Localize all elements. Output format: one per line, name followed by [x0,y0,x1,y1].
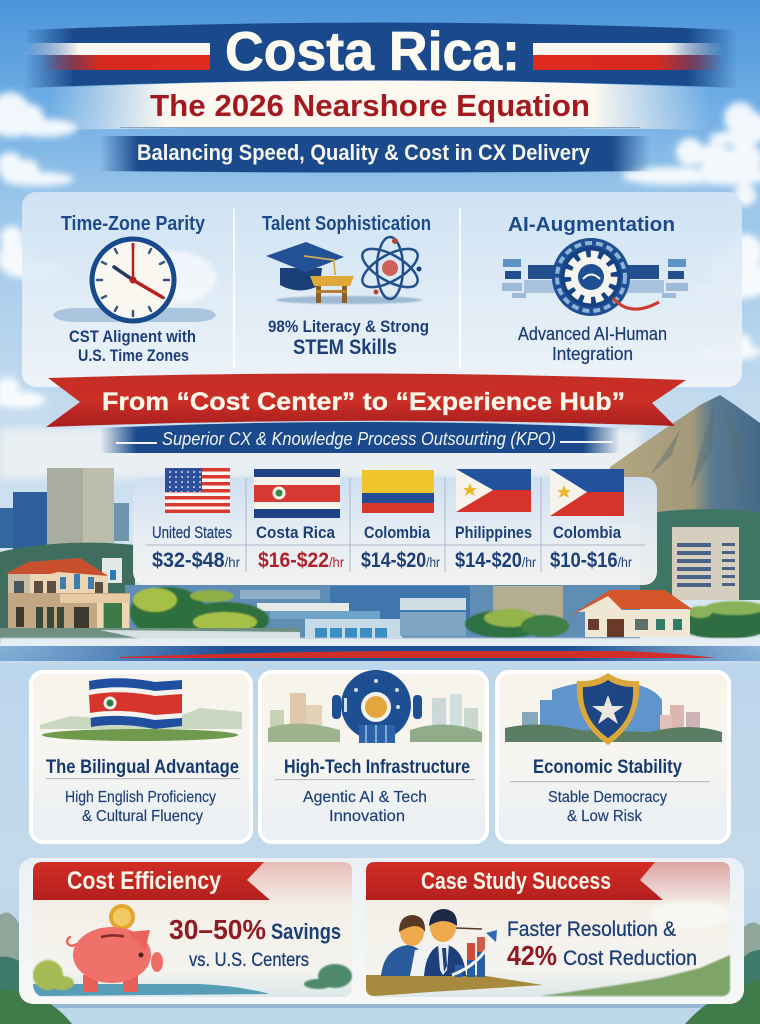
savings figure: 30–50% [169,914,266,945]
illustration: skyline [505,681,722,742]
icon: business team and growth chart [381,909,497,977]
result text: 42% [507,940,557,971]
KPO text: Superior CX & Knowledge Process Outsourting (KPO) [162,429,556,449]
result text [507,918,697,971]
country labels [152,523,621,542]
flag: Colombia [362,470,434,513]
city buildings [0,468,739,600]
card title: The Bilingual Advantage [46,757,239,778]
pillar: time-zone parity [53,213,216,365]
caption: Integration [552,344,633,364]
hourly rates: $10-$16/hr [550,549,632,572]
title banner [24,20,738,172]
savings figure: Savings [271,919,341,944]
country labels: United States [152,523,232,542]
house right [568,590,692,637]
savings figure [169,914,341,971]
illustration: waving flag [40,678,242,741]
scene haze [0,638,760,646]
caption: STEM Skills [293,336,397,359]
result text: Cost Reduction [563,947,697,970]
flag: Philippines repeat [550,469,624,516]
card title: High-Tech Infrastructure [284,757,470,778]
country labels: Colombia [364,523,430,542]
icon: piggy bank [67,904,163,992]
subtitle: The 2026 Nearshore Equation [150,88,590,123]
tagline: Balancing Speed, Quality & Cost in CX Delivery [137,140,591,165]
hourly rates [152,549,632,572]
result text: Faster Resolution & [507,918,676,941]
card: case study success [366,862,730,997]
card title: Economic Stability [533,757,682,778]
foreground foliage and water [0,912,760,1024]
caption: 98% Literacy & Strong [268,317,429,336]
flag: Costa Rica [254,469,340,518]
house left [5,558,130,628]
card text [548,789,667,825]
tab label: Case Study Success [421,868,611,895]
hourly rates: $32-$48/hr [152,549,240,572]
card: high-tech infrastructure [260,670,487,842]
greenery band [0,543,135,640]
left stripes [24,43,210,55]
icon: shield [577,673,639,745]
card text [65,789,216,825]
tab label: Cost Efficiency [67,867,221,895]
savings figure: vs. U.S. Centers [189,950,309,971]
right stripes [533,43,723,55]
card: cost efficiency [33,862,352,997]
caption: Advanced AI-Human [518,324,667,344]
panel: three pillars [22,192,742,387]
heading: Costa Rica: Costa Rica: [225,20,520,82]
red tab [366,862,663,900]
section divider stripe [0,646,760,661]
tagline band [100,136,650,172]
caption [69,327,196,365]
caption: U.S. Time Zones [78,346,189,365]
cloud [650,901,730,929]
flag: Philippines [456,469,531,512]
card text: Innovation [329,808,405,825]
center campus [240,586,563,638]
pillar: talent sophistication [262,213,431,359]
caption [268,317,429,359]
card text: Agentic AI & Tech [303,789,427,806]
caption [518,324,667,364]
card: economic stability [497,672,729,842]
clouds [0,92,760,408]
heading: AI-Augmentation [508,214,675,236]
foliage [540,955,730,996]
country labels: Colombia [553,523,621,542]
hourly rates: $14-$20/hr [361,549,440,572]
ribbon text: From “Cost Center” to “Experience Hub” [102,388,625,416]
pale haze behind rate panel [0,428,640,478]
icon: graduation cap and desk [266,242,422,304]
cream subtitle band [50,80,710,130]
card text: & Low Risk [567,808,643,825]
KPO band [100,422,620,453]
country labels: Costa Rica [256,523,335,542]
country labels: Philippines [455,523,532,542]
caption: CST Alignent with [69,327,196,346]
pillar: AI-augmentation [502,214,688,364]
hourly rates: $16-$22/hr [258,549,344,572]
illustration: skyline [268,693,482,742]
water [33,984,270,996]
icon: atom [357,237,423,299]
bushes [130,587,760,639]
flag: United States [165,468,230,513]
card text: High English Proficiency [65,789,216,806]
card text [303,789,427,825]
bottom frame [19,858,744,1004]
heading: Time-Zone Parity [61,213,206,235]
icon: AI head circuit [332,670,422,743]
card: bilingual advantage [31,672,251,842]
ribbon: cost center to experience hub [46,373,686,427]
mountain [610,395,760,560]
ground [366,975,543,996]
navy banner [24,22,738,88]
red tab [33,862,270,900]
hourly rates: $14-$20/hr [455,549,536,572]
card text: & Cultural Fluency [82,808,203,825]
panel: hourly rate comparison [133,468,657,585]
scene: mountain and skyline [0,395,760,643]
heading: Talent Sophistication [262,213,431,235]
card text: Stable Democracy [548,789,667,806]
ground left [0,628,300,643]
icon: AI gear [502,238,688,316]
icon: clock [53,239,216,322]
foliage [33,960,352,990]
